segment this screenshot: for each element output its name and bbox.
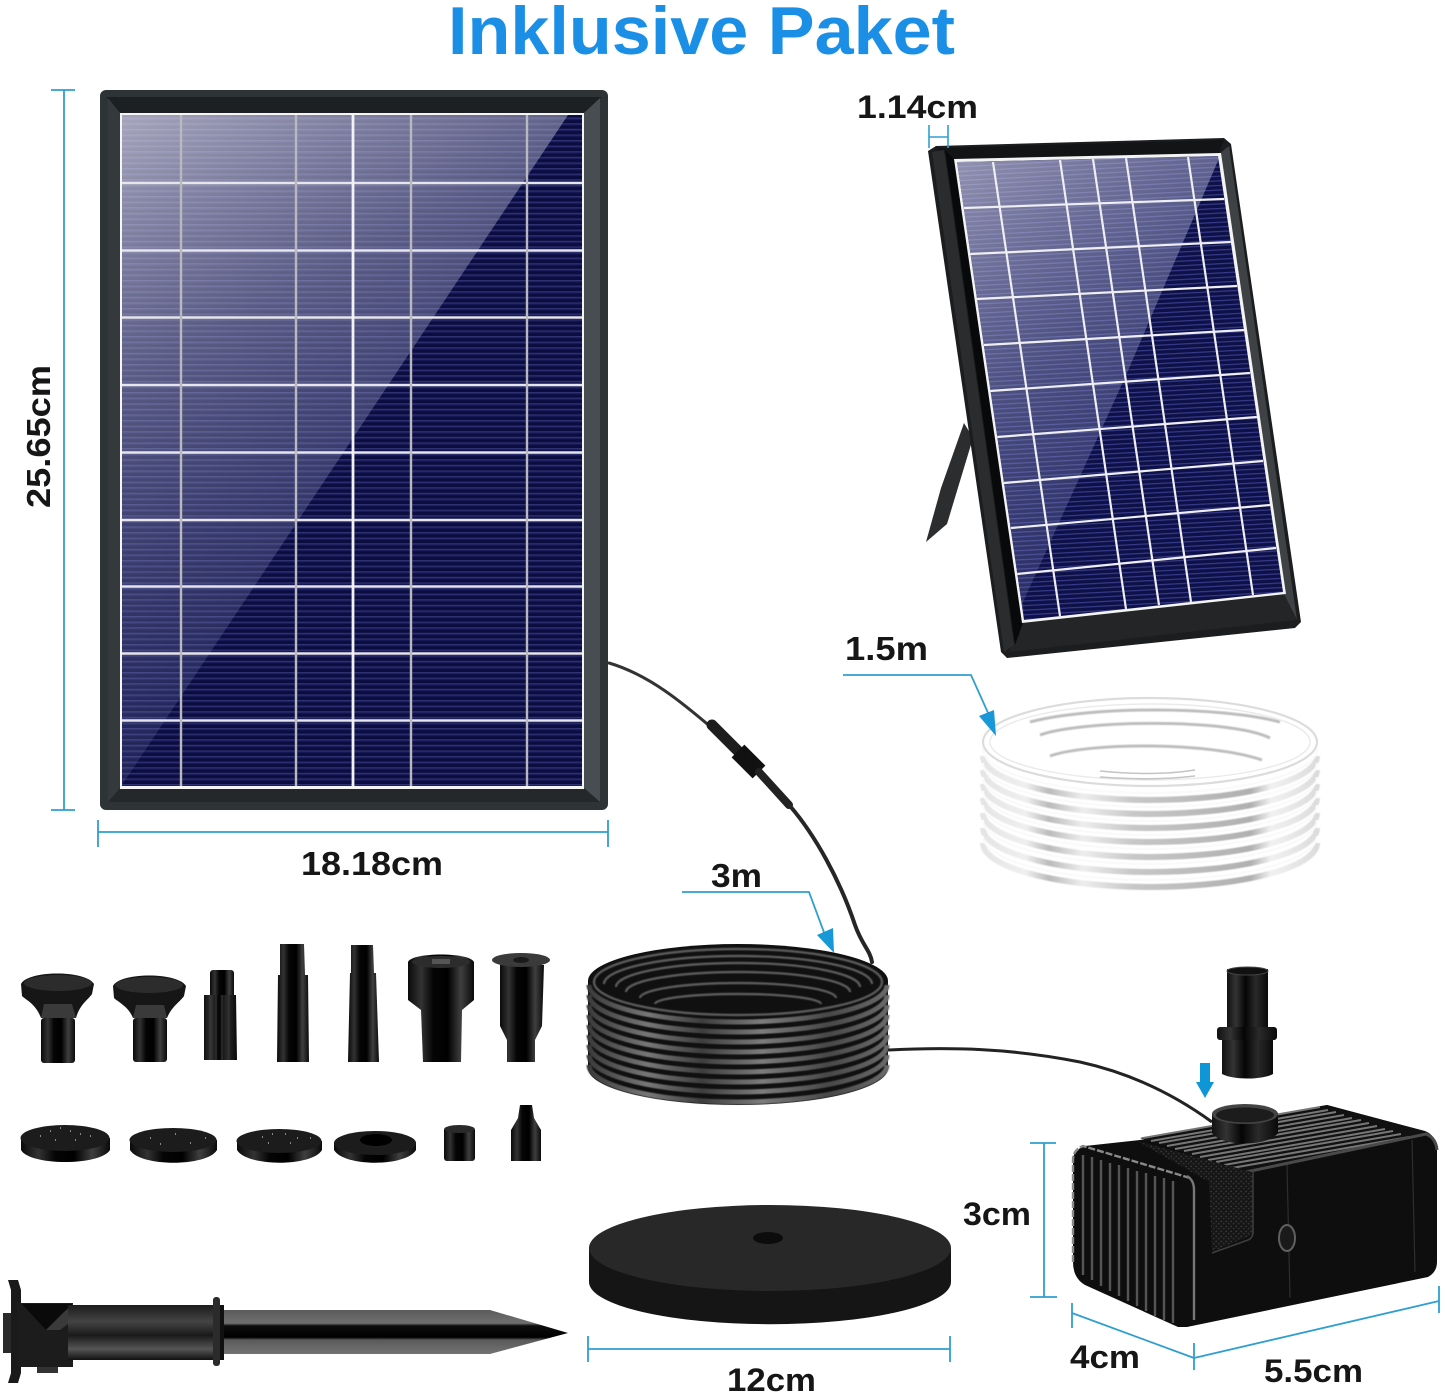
foam filter <box>1137 1141 1254 1252</box>
side dent <box>1279 1225 1295 1251</box>
stake shaft and tip <box>224 1310 568 1354</box>
outer windings <box>589 985 887 1102</box>
stake tube <box>68 1305 214 1360</box>
ribbed end <box>1073 1146 1194 1323</box>
glass reflection <box>122 115 568 785</box>
round foam base <box>589 1205 951 1324</box>
nozzle set: upper row <box>21 944 550 1063</box>
dimension: panel width <box>98 820 608 882</box>
inline connector <box>712 725 738 751</box>
side top highlight <box>1246 1134 1437 1172</box>
pump body <box>1073 1105 1437 1327</box>
nozzle set: lower row <box>20 1105 541 1163</box>
dimension: panel width: 18.18cm <box>301 845 443 882</box>
collar <box>213 1297 220 1366</box>
dimension: pump length <box>1194 1286 1439 1389</box>
outlet port <box>1212 1113 1278 1144</box>
hose end <box>1100 770 1195 779</box>
leader: cable length <box>682 857 834 953</box>
leader: cable length: 3m <box>711 857 762 894</box>
nozzle 5 <box>348 945 379 1062</box>
nozzle 3 <box>204 970 237 1060</box>
nozzle 1 <box>21 974 94 1063</box>
dimension: pump depth: 4cm <box>1070 1339 1140 1375</box>
black cable coil <box>588 944 888 1105</box>
spray disc 2 <box>130 1128 217 1163</box>
solar panel cable with connector <box>609 663 872 962</box>
casing seams <box>1287 1140 1415 1298</box>
pump adapter <box>1217 967 1277 1078</box>
dimension: pump depth <box>1070 1303 1194 1375</box>
transparent hose coil <box>983 698 1317 887</box>
dimension: pump height: 3cm <box>963 1196 1031 1232</box>
cable to pump <box>888 1049 1212 1122</box>
arrow: adapter into pump <box>1196 1063 1214 1098</box>
clip plate <box>8 1280 21 1383</box>
nozzle 4 <box>277 944 309 1062</box>
nozzle 2 <box>113 976 186 1062</box>
panel frame <box>100 90 608 810</box>
cone nozzle <box>511 1105 541 1161</box>
dimension: panel height <box>20 90 75 810</box>
centre hole <box>753 1232 783 1244</box>
ribbed top <box>1140 1105 1427 1172</box>
inner windings <box>594 949 882 1015</box>
dimension: panel height: 25.65cm <box>20 365 57 508</box>
large solar panel <box>100 90 608 810</box>
dimension: frame depth <box>857 89 978 148</box>
spray disc 3 <box>236 1129 322 1163</box>
hose windings <box>983 756 1317 887</box>
angled solar panel with stand <box>926 138 1301 658</box>
nozzle 6 <box>408 954 474 1062</box>
water pump <box>1073 1104 1437 1327</box>
dimension: base diameter <box>588 1336 950 1395</box>
leader: hose length: 1.5m <box>845 630 928 667</box>
nozzle 7 <box>492 953 550 1062</box>
dimension: pump height <box>963 1143 1057 1297</box>
ground stake <box>3 1280 568 1383</box>
spray disc 4 <box>334 1131 416 1163</box>
angled frame <box>928 138 1301 658</box>
small sleeve <box>444 1125 475 1161</box>
angled glass <box>954 153 1286 623</box>
spray disc 1 <box>20 1125 110 1162</box>
dimension: pump length: 5.5cm <box>1264 1353 1363 1389</box>
panel glass <box>120 113 584 789</box>
angled reflection <box>957 156 1220 620</box>
dimension: frame depth: 1.14cm <box>857 89 978 125</box>
elbow <box>17 1303 73 1367</box>
leader: hose length <box>843 630 996 736</box>
stand leg <box>926 423 973 542</box>
